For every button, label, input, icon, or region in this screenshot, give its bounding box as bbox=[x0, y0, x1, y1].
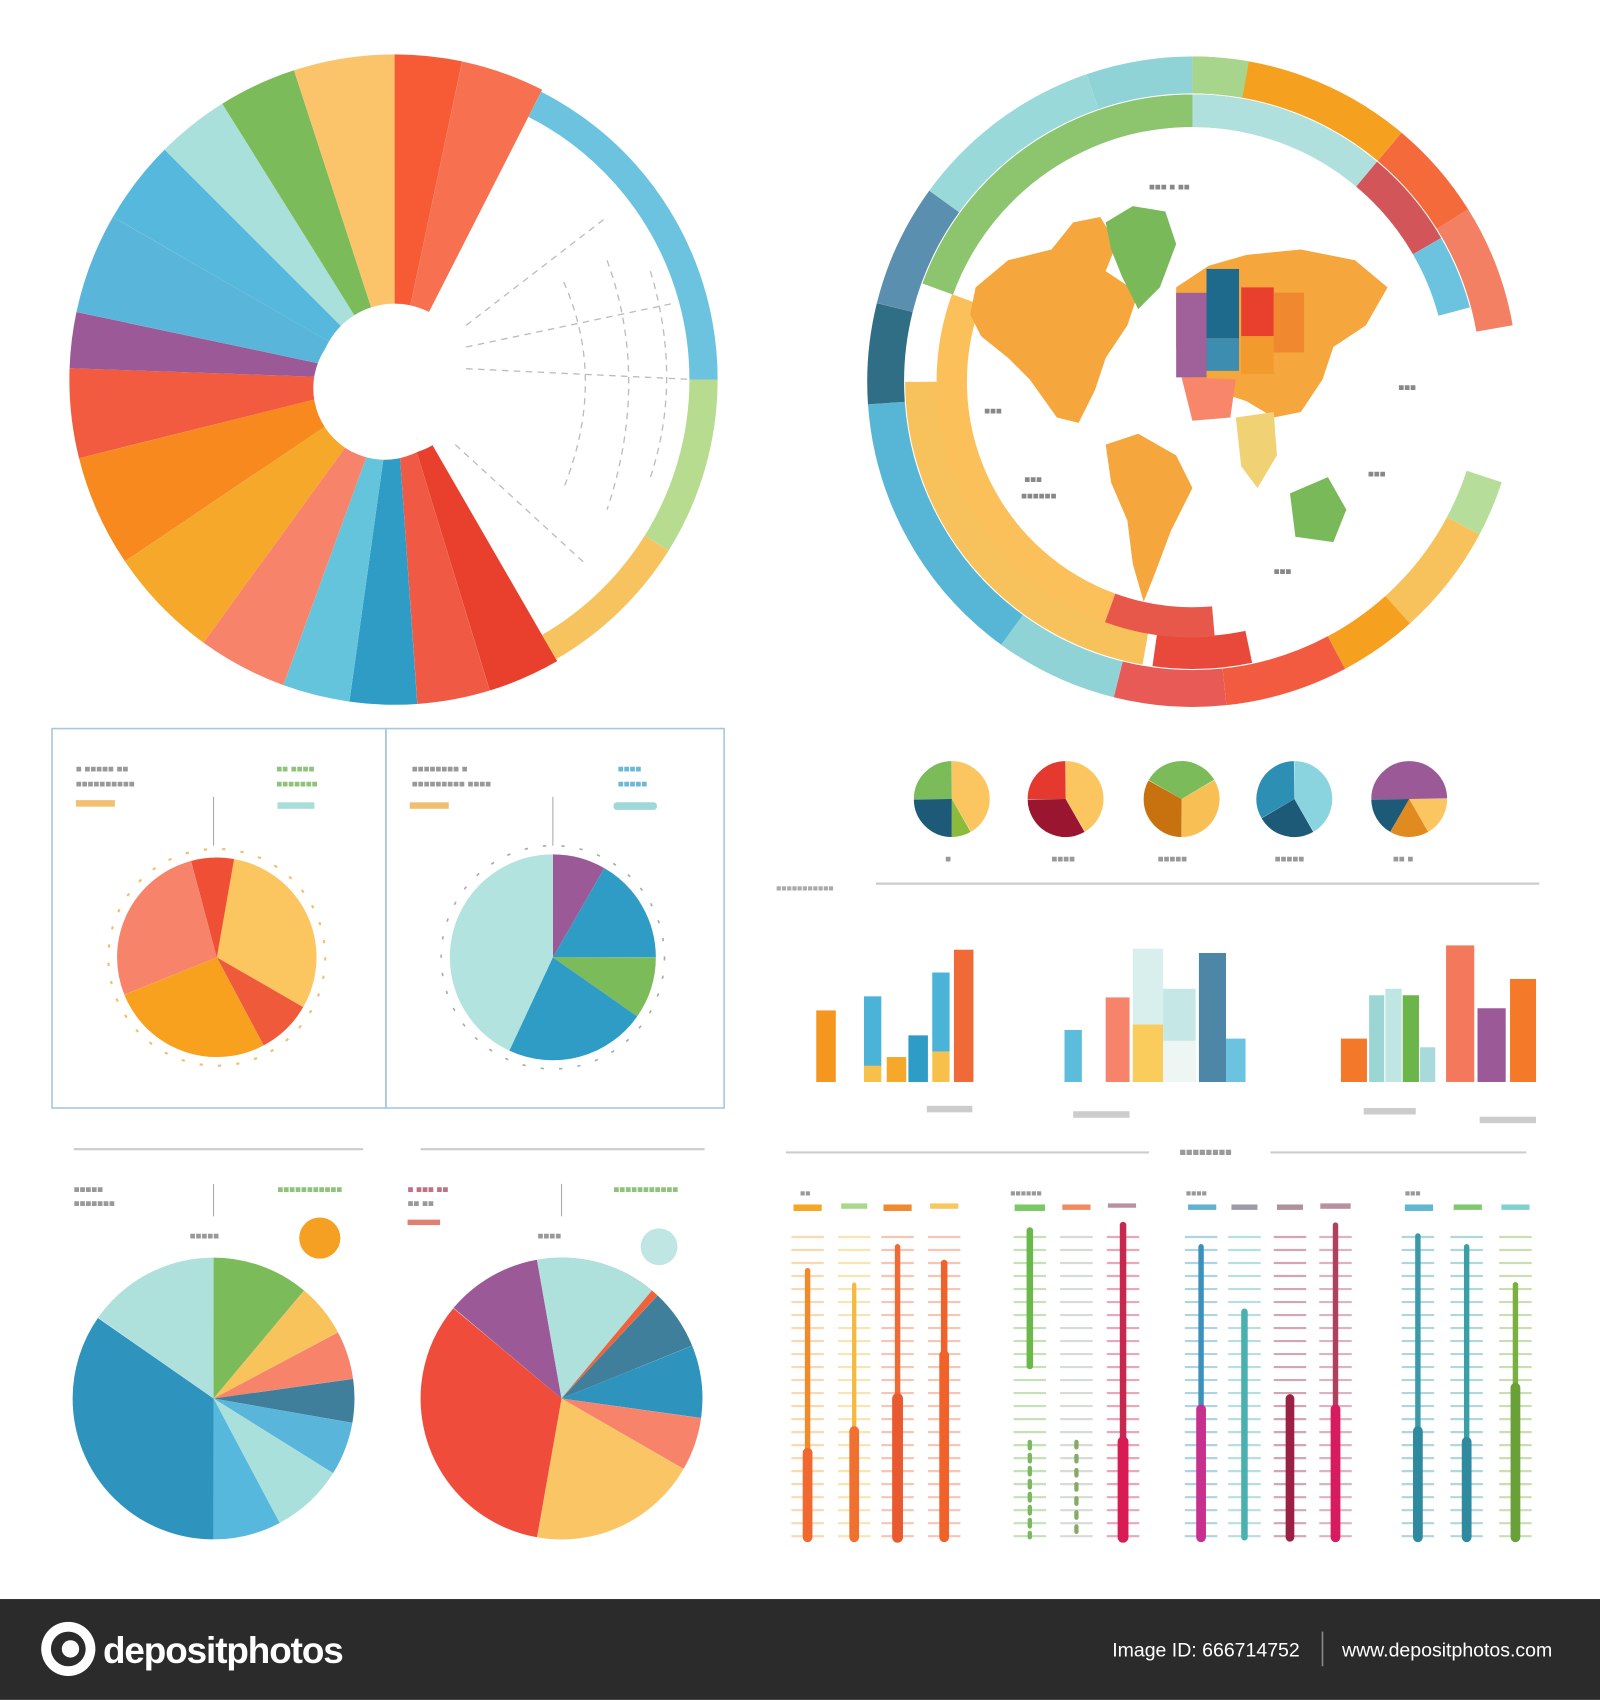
pie 1 bbox=[149, 889, 285, 1025]
bottom pie chart left: ■■■■■ bbox=[74, 1185, 103, 1196]
panel: pie chart box 1: ■ ■■■■■ ■■ bbox=[76, 764, 129, 775]
bar chart group 2 bbox=[1064, 949, 1246, 1082]
bottom pie chart right: ■■■■ bbox=[538, 1231, 561, 1242]
world map: ■■■ bbox=[1274, 567, 1291, 578]
bottom pie chart left: ■■■■■■■■■■■ bbox=[278, 1185, 342, 1196]
small pie charts row: ■■■■ bbox=[1051, 854, 1075, 865]
small pie charts row: ■■■■■ bbox=[1158, 854, 1187, 865]
panel: pie chart box 2 bbox=[386, 729, 724, 1108]
pie 2 bbox=[481, 886, 625, 1029]
bottom pie chart left: ■■■■■■■ bbox=[74, 1199, 115, 1210]
squiggle bar charts: ■■ bbox=[800, 1188, 810, 1198]
bottom pie chart left bbox=[74, 1149, 363, 1498]
world map: ■■■ ■ ■■ bbox=[1149, 182, 1190, 193]
footer bar: Image ID: 666714752 bbox=[1112, 1640, 1300, 1662]
squiggle bar charts: ■■■■■■ bbox=[1010, 1188, 1042, 1198]
bottom pie chart right: ■■ ■■ bbox=[408, 1199, 434, 1210]
squiggle bar charts: ■■■■ bbox=[1186, 1188, 1207, 1198]
squiggle bar charts: ■■■ bbox=[1405, 1188, 1421, 1198]
world map: ■■■■■■ bbox=[1021, 491, 1057, 502]
panel: pie chart box 2: ■■■■■ bbox=[618, 779, 647, 790]
squiggle bar charts: ■■■■■■■■ bbox=[1179, 1147, 1232, 1159]
big radial pie chart bbox=[0, 0, 820, 805]
bar chart group 1 bbox=[816, 950, 973, 1082]
small pie charts row: ■■■■■ bbox=[1275, 854, 1304, 865]
world map: ■■■ bbox=[1398, 382, 1416, 393]
panel: pie chart box 2: ■■■■ bbox=[618, 764, 642, 775]
bar chart group 3 bbox=[1341, 945, 1536, 1082]
world map bbox=[970, 182, 1416, 602]
small pie charts row: ■■ ■ bbox=[1393, 854, 1413, 865]
footer bar bbox=[0, 1599, 1600, 1700]
panel: pie chart box 2: ■■■■■■■■ ■ bbox=[412, 764, 468, 775]
world map: ■■■ bbox=[1368, 469, 1386, 480]
bottom pie chart right: ■ ■■■ ■■ bbox=[408, 1185, 448, 1196]
panel: pie chart box 1: ■■ ■■■■ bbox=[276, 764, 315, 775]
bottom pie chart right bbox=[408, 1149, 705, 1498]
bottom pie chart left: ■■■■■ bbox=[190, 1231, 219, 1242]
world map: ■■■ bbox=[1024, 475, 1042, 486]
ring chart with world map bbox=[759, 0, 1600, 815]
squiggle bar charts bbox=[786, 1147, 1530, 1537]
panel: pie chart box 1: ■■■■■■■■■■ bbox=[76, 779, 135, 790]
panel: pie chart box 2: ■■■■■■■■■ ■■■■ bbox=[412, 779, 491, 790]
footer bar: depositphotos bbox=[103, 1630, 343, 1671]
world map: ■■■ bbox=[984, 406, 1002, 417]
panel: pie chart box 1 bbox=[52, 729, 386, 1108]
text: ■■■■■■■■■■■ bbox=[776, 883, 834, 893]
panel: pie chart box 1: ■■■■■■■ bbox=[276, 779, 318, 790]
small pie charts row: ■ bbox=[945, 854, 951, 865]
footer bar: www.depositphotos.com bbox=[1341, 1640, 1552, 1662]
small pie charts row bbox=[926, 773, 1435, 865]
icon: logo bbox=[41, 1622, 95, 1676]
bottom pie chart right: ■■■■■■■■■■■ bbox=[614, 1185, 678, 1196]
